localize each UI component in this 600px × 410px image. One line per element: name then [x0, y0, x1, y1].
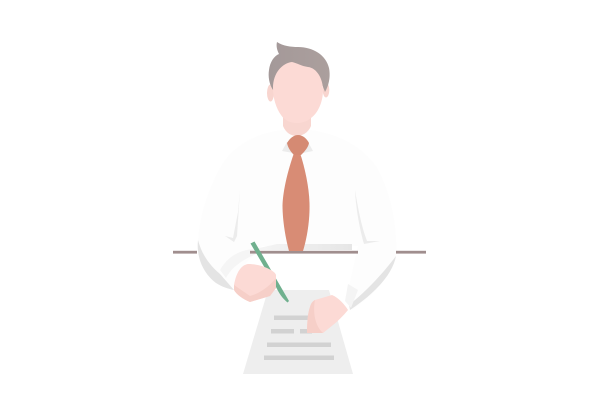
- text lines: [264, 316, 334, 360]
- pen: [250, 242, 289, 302]
- collar: [282, 142, 313, 153]
- ears: [267, 82, 329, 102]
- left hand: [234, 264, 276, 302]
- hair: [269, 42, 330, 92]
- sleeve shadows: [198, 190, 396, 310]
- tie: [282, 135, 310, 251]
- face: [273, 62, 323, 123]
- document: [243, 290, 353, 374]
- shirt body: [198, 130, 396, 310]
- desk line: [173, 251, 426, 254]
- neck: [283, 112, 311, 136]
- right hand: [307, 295, 348, 333]
